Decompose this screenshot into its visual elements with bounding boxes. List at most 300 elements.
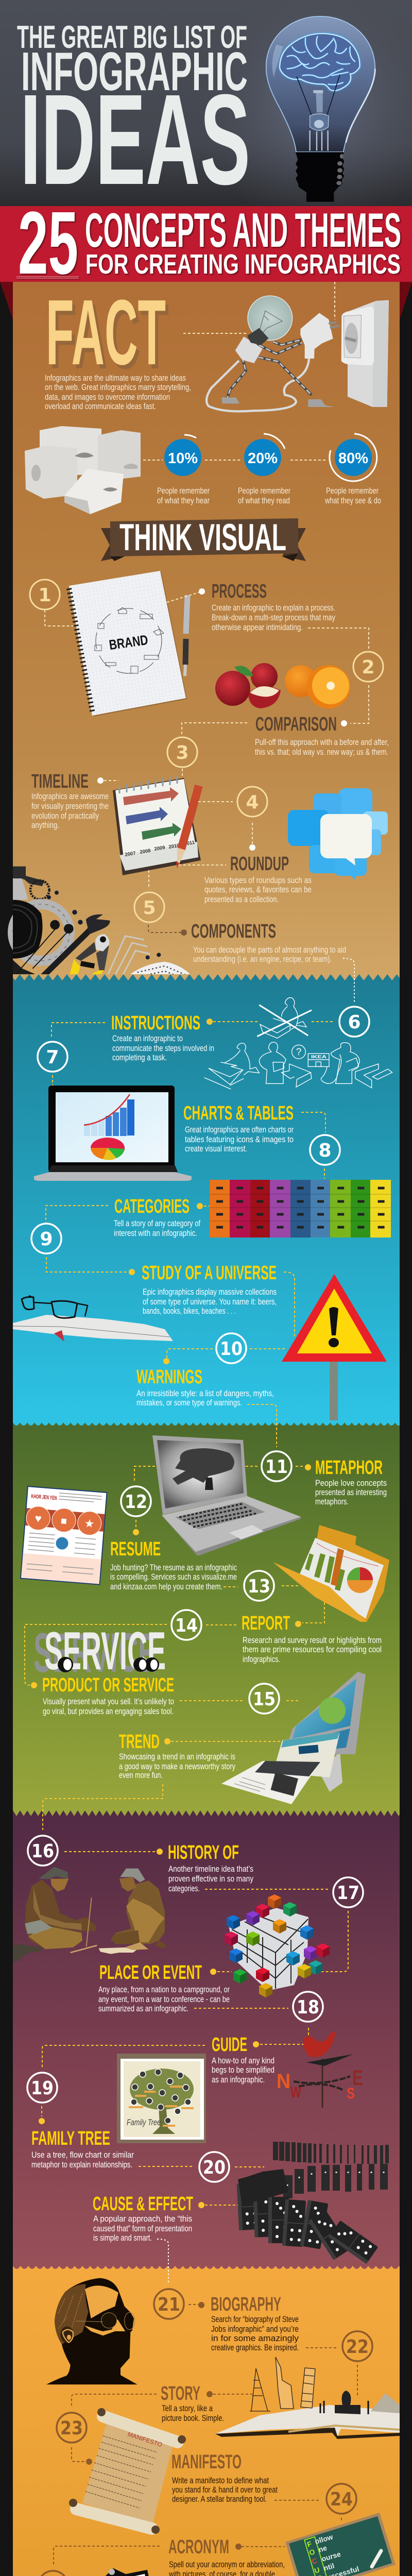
item 7 number xyxy=(38,1042,67,1072)
dot xyxy=(235,2544,242,2550)
text: categories: Tell a story of any category of xyxy=(114,1218,200,1228)
text: manifesto: you stand for & hand it over to great xyxy=(172,2485,278,2495)
number 22: 22 xyxy=(346,2336,369,2358)
dot xyxy=(207,2391,213,2397)
text: stat captions: People remember xyxy=(238,486,290,496)
dot xyxy=(341,720,347,726)
item 23: manifesto xyxy=(57,2408,278,2534)
panel: header xyxy=(0,0,412,211)
panel: orange section xyxy=(13,2239,400,2576)
number 17: 17 xyxy=(337,1883,359,1904)
panel: fact and think visual xyxy=(0,193,412,982)
text: place or event: Any place, from a nation to a campground, or xyxy=(98,1985,230,1994)
item 3: timeline xyxy=(31,737,201,875)
number 1: 1 xyxy=(38,585,52,606)
text: resume: and kinzaa.com help you create them. xyxy=(110,1582,222,1591)
icon: weather vane xyxy=(277,2031,363,2108)
text: stat captions: of what they read xyxy=(238,496,290,505)
text: resume: Job hunting? The resume as an infographic xyxy=(110,1563,237,1572)
icon: warning sign xyxy=(282,1274,387,1423)
text: history of: categories. xyxy=(168,1884,200,1893)
text: process xyxy=(212,603,335,632)
heading: report: REPORT xyxy=(242,1613,290,1634)
number 5: 5 xyxy=(143,897,156,919)
number 8 xyxy=(310,1135,340,1165)
text: biography: in for some amazingly xyxy=(211,2333,299,2343)
ribbon tail: right xyxy=(400,282,412,319)
heading: trend: TREND xyxy=(119,1731,160,1753)
item 14: product or service xyxy=(31,1610,201,1716)
stat: 20 percent: 20% xyxy=(248,450,278,467)
text: biography xyxy=(211,2314,299,2352)
text: guide: as an infographic. xyxy=(212,2075,265,2084)
number 5 xyxy=(134,892,164,922)
icon: cube of faces xyxy=(25,426,141,514)
stat: 80 percent: 80% xyxy=(338,450,368,467)
ribbon: think visual: THINK VISUAL xyxy=(119,517,286,558)
number 24: 24 xyxy=(330,2489,353,2510)
icon: clipboard with pen xyxy=(77,2568,168,2576)
item 15: trend xyxy=(119,1672,366,1804)
heading: cause and effect: CAUSE & EFFECT xyxy=(93,2193,193,2215)
text: study of a universe: bands, books, bikes, beaches . . . xyxy=(143,1306,236,1316)
heading: instructions: INSTRUCTIONS xyxy=(111,1012,200,1034)
text: family tree xyxy=(31,2150,134,2170)
icon: manifesto scroll xyxy=(69,2408,186,2534)
icon: timeline calendar with pencil: 2007 xyxy=(125,851,136,858)
number 19: 19 xyxy=(31,2078,54,2099)
text: study of a universe: of some type of universe. You name it: beers, xyxy=(143,1297,277,1307)
text: cause and effect: A popular approach, the “this xyxy=(93,2214,192,2224)
number 21 xyxy=(154,2289,184,2319)
icon: service word on wheels xyxy=(33,1621,166,1684)
heading: manifesto: MANIFESTO xyxy=(171,2451,242,2473)
number 9: 9 xyxy=(40,1229,53,1250)
headline: 25 concepts and themes xyxy=(16,193,401,293)
item 22: story xyxy=(161,2331,400,2439)
heading: study of a universe: STUDY OF A UNIVERSE xyxy=(142,1262,277,1284)
icon: timeline calendar with pencil: 2011 xyxy=(184,840,196,847)
text: fact intro xyxy=(45,373,191,411)
text: manifesto: designer. A stellar branding tool. xyxy=(172,2494,267,2504)
text: instructions: communicate the steps involved in xyxy=(112,1043,214,1053)
text: history of xyxy=(168,1864,253,1893)
text: categories: interest with an infographic. xyxy=(114,1228,197,1238)
text: story: picture book. Simple. xyxy=(162,2413,224,2423)
icon: chalkboard focus acronym: F xyxy=(306,2539,313,2549)
text: fact intro: overload and communicate ideas fast. xyxy=(45,401,156,411)
text: charts and tables xyxy=(185,1125,294,1154)
text: timeline: Infographics are awesome xyxy=(31,791,109,801)
icon: chalkboard focus acronym: ourse xyxy=(320,2550,342,2563)
dot xyxy=(163,1358,169,1364)
text: report xyxy=(243,1635,382,1664)
text: family tree: Use a tree, flow chart or similar xyxy=(31,2150,134,2160)
title xyxy=(17,20,250,211)
item 20: cause and effect xyxy=(93,2142,389,2264)
number 13 xyxy=(244,1571,274,1601)
text: trend: even more fun. xyxy=(119,1770,163,1780)
number 11: 11 xyxy=(265,1456,288,1478)
heading: process: PROCESS xyxy=(212,581,267,602)
text: biography: Search for “biography of Steve xyxy=(211,2314,299,2324)
heading: biography: BIOGRAPHY xyxy=(211,2294,281,2315)
text: biography: Jobs infographic” and you’re xyxy=(211,2324,299,2334)
text: metaphor: metaphors. xyxy=(315,1497,349,1506)
text: history of: Another timeline idea that’s xyxy=(168,1864,253,1874)
text: charts and tables: create visual interest. xyxy=(185,1144,247,1154)
text: process: Create an infographic to explain a process. xyxy=(212,603,335,613)
heading: resume: RESUME xyxy=(110,1538,161,1560)
number 20 xyxy=(199,2152,229,2182)
stat: 10 percent xyxy=(164,435,201,476)
dot xyxy=(207,1019,213,1025)
text: story xyxy=(162,2403,224,2423)
heading: categories: CATEGORIES xyxy=(114,1196,190,1217)
heading: family tree: FAMILY TREE xyxy=(31,2128,110,2149)
icon: folder with charts xyxy=(273,1525,389,1622)
heading: product or service: PRODUCT OR SERVICE xyxy=(42,1674,174,1696)
icon: portrait silhouette xyxy=(46,2278,138,2384)
heading: warnings: WARNINGS xyxy=(136,1366,202,1388)
icon: monitor and brochures xyxy=(221,1672,366,1804)
number 18 xyxy=(293,1992,323,2022)
text: components: understanding (i.e. an engine, recipe, or team). xyxy=(193,954,332,964)
ribbon tail: left xyxy=(0,282,13,319)
text: place or event: any event, from a war to conference - can be xyxy=(98,1994,230,2004)
icon: book with landmarks xyxy=(215,2357,400,2439)
heading: roundup: ROUNDUP xyxy=(230,853,289,875)
ribbon: think visual xyxy=(101,517,306,561)
text: report: them are prime resources for compiling cool xyxy=(243,1645,382,1654)
text: warnings: mistakes, or some type of warnings. xyxy=(136,1398,242,1408)
number 12: 12 xyxy=(125,1492,147,1513)
dot xyxy=(86,2459,92,2465)
item 6: instructions xyxy=(111,997,392,1089)
number 19 xyxy=(27,2073,57,2103)
number 6: 6 xyxy=(348,1012,361,1033)
icon: falling dominoes xyxy=(237,2142,389,2264)
icon: infographic resume: KHOR JEN YEN xyxy=(31,1494,57,1501)
item 24: acronym xyxy=(54,2484,396,2576)
icon: framed family tree: Family Tree xyxy=(127,2117,161,2127)
number 3 xyxy=(167,737,197,767)
text: trend: Showcasing a trend in an infographic is xyxy=(119,1752,235,1761)
text: guide: A how-to of any kind xyxy=(212,2056,274,2065)
text: instructions: completing a task. xyxy=(112,1053,167,1062)
text: roundup: Various types of roundups such as xyxy=(204,875,312,885)
icon: service word on wheels: SERVICE xyxy=(33,1621,157,1684)
dot xyxy=(305,1464,311,1470)
item 11: metaphor xyxy=(152,1435,387,1556)
text: acronym: Spell out your acronym or abbreviation, xyxy=(169,2560,285,2569)
text: metaphor xyxy=(315,1478,387,1506)
icon: lamp robot plugging into socket xyxy=(207,296,389,411)
item 17: place or event xyxy=(98,1877,363,2013)
text: place or event: summarized as an infographic. xyxy=(98,2004,188,2013)
icon: timeline calendar with pencil: 2009 xyxy=(154,845,165,852)
icon: laptop with elephant xyxy=(152,1435,301,1556)
dot xyxy=(133,1529,139,1535)
text: product or service: go viral, but provides an engaging sales tool. xyxy=(43,1706,174,1716)
dot xyxy=(199,588,205,595)
title: THE GREAT BIG LIST OF xyxy=(17,20,247,55)
heading: charts and tables: CHARTS & TABLES xyxy=(183,1103,294,1124)
text: study of a universe xyxy=(143,1287,277,1316)
icon: colored filing cabinets xyxy=(210,1180,391,1238)
heading: components: COMPONENTS xyxy=(191,921,276,942)
text: components: You can decouple the parts of almost anything to aid xyxy=(193,945,346,955)
text: process: Break-down a multi-step process that may xyxy=(212,613,335,622)
item 7 number: 7 xyxy=(46,1047,59,1068)
icon: chalkboard focus acronym: U xyxy=(313,2566,321,2575)
dot xyxy=(253,2041,259,2047)
text: study of a universe: Epic infographics display massive collections xyxy=(143,1287,277,1297)
icon: infographic resume: ■ xyxy=(60,1515,67,1527)
panel: maroon section xyxy=(13,1784,400,2267)
text: components xyxy=(193,945,346,964)
icon: chalkboard focus acronym xyxy=(285,2513,396,2576)
number 23: 23 xyxy=(60,2418,83,2439)
text: cause and effect: is simple and smart. xyxy=(93,2233,152,2243)
stat: 80 percent xyxy=(330,434,377,481)
dot xyxy=(157,1849,163,1855)
maroon paper edge xyxy=(13,2264,400,2270)
text: trend: a good way to make a newsworthy story xyxy=(119,1761,235,1771)
item 19: family tree xyxy=(27,2054,206,2170)
icon: cavemen making fire xyxy=(13,1867,167,1961)
number 2 xyxy=(353,652,383,682)
dot xyxy=(295,1621,301,1627)
stat: 20 percent xyxy=(244,434,285,476)
dot xyxy=(129,1269,135,1275)
number 14 xyxy=(171,1610,201,1640)
icon: chalkboard focus acronym: O xyxy=(308,2547,316,2557)
number 22 xyxy=(342,2331,372,2361)
text: warnings xyxy=(136,1388,274,1408)
text: guide: begs to be simplified xyxy=(212,2065,274,2075)
icon: chalkboard focus acronym: ntil xyxy=(322,2562,335,2572)
text: roundup: presented as a collection. xyxy=(204,894,279,904)
number 15: 15 xyxy=(253,1689,276,1710)
number 11 xyxy=(262,1451,291,1481)
text: fact intro: Infographics are the ultimate way to share ideas xyxy=(45,373,186,383)
number 9 xyxy=(31,1224,61,1253)
text: trend xyxy=(119,1752,235,1780)
icon: speech bubbles xyxy=(288,788,388,880)
heading: place or event: PLACE OR EVENT xyxy=(99,1962,202,1984)
text: roundup xyxy=(204,875,312,904)
question mark: ? xyxy=(296,1047,301,1058)
brown paper edge xyxy=(13,974,400,980)
icon: notebook with brand diagram: BRAND xyxy=(108,632,149,653)
item 10: study of a universe xyxy=(13,1262,277,1342)
item 1: process xyxy=(30,571,335,717)
item 8: charts and tables xyxy=(34,1086,340,1181)
text: stat captions: People remember xyxy=(157,486,210,496)
text: stat captions: of what they hear xyxy=(157,496,210,505)
item 25: list xyxy=(38,2568,323,2576)
title: INFOGRAPHIC xyxy=(21,41,248,102)
dot xyxy=(31,1682,37,1688)
text: manifesto xyxy=(172,2476,278,2504)
icon: timeline calendar with pencil: 2008 xyxy=(140,848,151,855)
number 2: 2 xyxy=(362,657,375,678)
icon: notebook with brand diagram xyxy=(69,571,187,717)
icon: book and glasses xyxy=(13,1296,173,1342)
number 12 xyxy=(121,1486,151,1516)
text: place or event xyxy=(98,1985,230,2013)
text: manifesto: Write a manifesto to define what xyxy=(172,2476,269,2485)
icon: weather vane: W xyxy=(290,2084,301,2101)
icon: timeline calendar with pencil xyxy=(113,775,201,875)
text: report: infographics. xyxy=(243,1654,280,1664)
icon: weather vane: N xyxy=(277,2070,290,2093)
number 4: 4 xyxy=(246,792,259,813)
panel: green section xyxy=(13,1404,400,1812)
number 16 xyxy=(28,1836,58,1866)
icon: assembly line drawings xyxy=(204,997,392,1089)
text: instructions xyxy=(112,1033,214,1062)
text: stat captions xyxy=(157,486,381,505)
heading: timeline: TIMELINE xyxy=(31,771,89,792)
text: timeline: evolution of practically xyxy=(31,811,99,821)
number 13: 13 xyxy=(248,1576,270,1597)
ikea sign: IKEA xyxy=(311,1055,327,1059)
text: metaphor: People love concepts xyxy=(315,1478,387,1488)
text: resume: is compelling. Services such as visualize.me xyxy=(110,1572,237,1582)
text: stat captions: People remember xyxy=(326,486,379,496)
icon: chalkboard focus acronym: ollow xyxy=(314,2533,334,2546)
text: process: otherwise appear intimidating. xyxy=(212,622,303,632)
icon: pen xyxy=(185,595,187,676)
dot xyxy=(97,777,104,784)
number 10: 10 xyxy=(220,1338,243,1360)
number 15 xyxy=(249,1684,279,1714)
item 21: biography xyxy=(154,2289,299,2352)
icon: bike parts and tools xyxy=(13,867,193,982)
number 4 xyxy=(237,787,267,817)
icon: framed family tree xyxy=(117,2054,206,2143)
dot xyxy=(39,2118,45,2124)
title: IDEAS xyxy=(20,67,250,211)
text: timeline xyxy=(31,791,109,830)
text: metaphor: presented as interesting xyxy=(315,1487,387,1497)
text: stat captions: what they see & do xyxy=(324,496,381,505)
number 21: 21 xyxy=(158,2294,180,2315)
dot xyxy=(210,1969,216,1975)
number 16: 16 xyxy=(31,1841,54,1862)
text: fact intro: data, and images to overcome information xyxy=(45,392,170,402)
dot xyxy=(181,929,187,936)
text: warnings: An irresistible style: a list of dangers, myths, xyxy=(136,1388,274,1398)
text: product or service: Visually present what you sell. It’s unlikely to xyxy=(43,1697,174,1706)
number 25 xyxy=(38,2571,68,2576)
number 10 xyxy=(216,1333,246,1363)
icon: timeline calendar with pencil: 2010 xyxy=(168,843,180,850)
text: instructions: Create an infographic to xyxy=(112,1033,183,1043)
number 3: 3 xyxy=(176,742,189,764)
icon: laptop with chart xyxy=(34,1086,192,1181)
heading: history of: HISTORY OF xyxy=(168,1842,239,1863)
text: product or service xyxy=(43,1697,174,1716)
icon: apples and oranges xyxy=(215,663,350,708)
item 9: categories xyxy=(114,1180,391,1238)
icon: weather vane: E xyxy=(352,2065,363,2090)
text: biography: creative graphics. Be inspired. xyxy=(211,2343,299,2352)
text: charts and tables: tables featuring icons & images to xyxy=(185,1134,294,1144)
text: timeline: anything. xyxy=(31,820,59,830)
number 20: 20 xyxy=(203,2157,226,2178)
number 14: 14 xyxy=(175,1615,198,1636)
text: timeline: for visually presenting the xyxy=(31,801,109,811)
green paper edge xyxy=(13,1810,400,1816)
heading: comparison: COMPARISON xyxy=(255,714,337,735)
dot xyxy=(198,2202,204,2208)
item 13: report xyxy=(242,1525,389,1664)
icon: light bulb with brain xyxy=(266,16,375,202)
heading: acronym: ACRONYM xyxy=(168,2536,229,2558)
panel: fact and think visual: FACT xyxy=(46,281,166,384)
text: story: Tell a story, like a xyxy=(162,2403,213,2413)
icon: manifesto scroll: MANIFESTO xyxy=(127,2431,163,2448)
text: family tree: metaphor to explain relationships. xyxy=(31,2160,132,2170)
text: resume xyxy=(110,1563,237,1591)
icon: infographic resume xyxy=(21,1486,107,1585)
heading: guide: GUIDE xyxy=(212,2034,247,2056)
icon: infographic resume: ♥ xyxy=(35,1512,42,1525)
item: warnings xyxy=(136,1358,274,1408)
text: comparison xyxy=(255,737,389,757)
item 12: resume xyxy=(21,1486,237,1591)
number 17 xyxy=(333,1877,363,1907)
dot xyxy=(164,1738,170,1744)
number 1 xyxy=(30,580,60,609)
stat: 10 percent: 10% xyxy=(168,450,198,467)
heading: story: STORY xyxy=(161,2383,200,2404)
icon: chalkboard focus acronym: ne xyxy=(317,2544,328,2554)
number 6 xyxy=(339,1007,369,1037)
item 18: guide xyxy=(212,1992,363,2108)
icon: weather vane: S xyxy=(347,2085,355,2102)
dot xyxy=(249,844,255,851)
icon: infographic resume: ★ xyxy=(84,1517,95,1530)
text: guide xyxy=(212,2056,274,2084)
number 23 xyxy=(57,2413,87,2443)
text: fact intro: on the web. Great infographics marry storytelling, xyxy=(45,382,191,392)
text: acronym xyxy=(168,2560,287,2576)
text: history of: proven effective in so many xyxy=(168,1874,253,1884)
headline: 25 concepts and themes: 25 xyxy=(18,193,78,293)
text: categories xyxy=(114,1218,200,1238)
banner xyxy=(0,193,412,293)
item 5: components xyxy=(13,867,346,982)
panel: teal section xyxy=(13,958,400,1423)
item 2: comparison xyxy=(215,652,389,757)
number 18: 18 xyxy=(297,1997,319,2018)
dot xyxy=(198,2302,204,2308)
teal paper edge xyxy=(13,1420,400,1427)
icon: chalkboard focus acronym: C xyxy=(311,2556,318,2566)
number 24 xyxy=(327,2484,356,2514)
number 8: 8 xyxy=(318,1140,332,1161)
item 4: roundup xyxy=(179,787,388,904)
item 16: history of xyxy=(13,1836,253,1961)
text: cause and effect: caused that” form of presentation xyxy=(93,2224,192,2233)
icon: colorful cube xyxy=(225,1894,330,1997)
text: charts and tables: Great infographics are often charts or xyxy=(185,1125,294,1134)
text: roundup: quotes, reviews, & favorites can be xyxy=(204,885,312,894)
